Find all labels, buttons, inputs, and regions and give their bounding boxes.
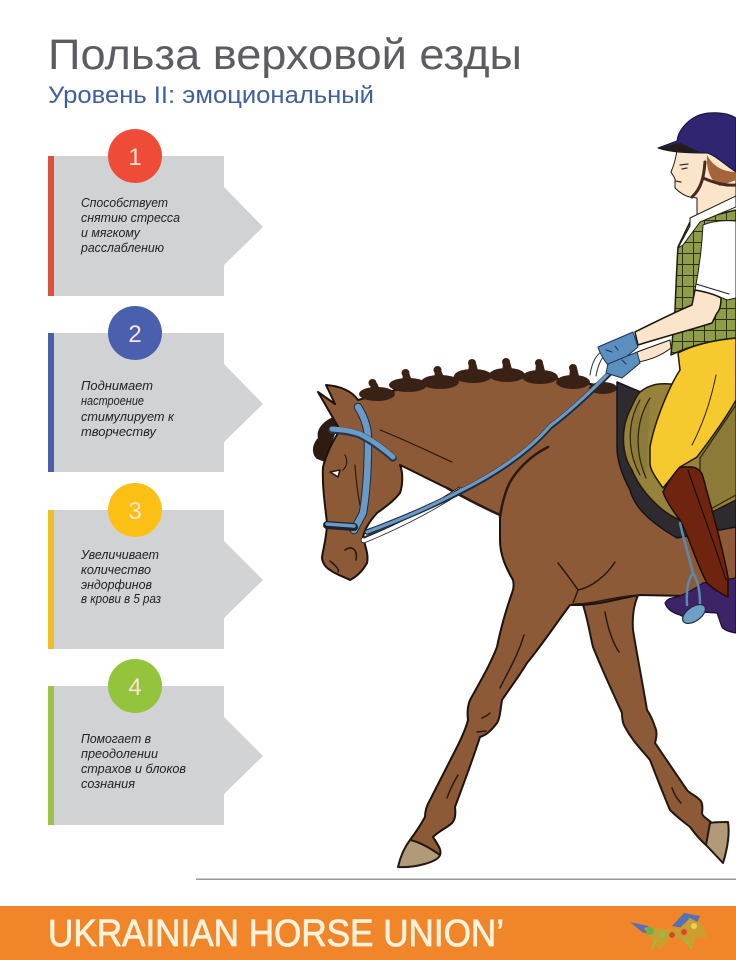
panel: benefit 3: в крови в 5 раз <box>81 592 161 606</box>
rider leg: breeches <box>650 338 736 488</box>
panel: benefit 4: преодолении <box>81 747 158 761</box>
horse body with near foreleg <box>318 374 736 867</box>
rider arm <box>635 290 721 345</box>
braided mane <box>359 358 617 401</box>
rider sleeve <box>695 221 736 300</box>
panel: benefit 3: Увеличивает <box>80 548 159 562</box>
rider neck and face <box>671 150 736 215</box>
panel: benefit 4: 4 <box>128 674 142 701</box>
panel: benefit 4: сознания <box>81 777 135 791</box>
title: Польза верховой езды <box>48 31 522 79</box>
forelock <box>313 417 340 462</box>
ground line <box>196 878 736 880</box>
panel: benefit 1 <box>48 129 263 296</box>
panel: benefit 1: и мягкому <box>81 226 141 240</box>
panel: benefit 3 <box>48 483 263 649</box>
panel: benefit 2: Поднимает <box>81 379 153 393</box>
logo: folk-art horse <box>630 913 707 950</box>
riding helmet <box>658 113 736 172</box>
horse anatomy lines <box>330 430 640 798</box>
riding gloves <box>598 332 640 378</box>
panel: benefit 2: 2 <box>128 321 142 348</box>
panel: benefit 3: количество <box>81 563 151 577</box>
footer band <box>0 906 736 960</box>
panel: benefit 1: расслаблению <box>80 241 165 255</box>
footer brand name: UKRAINIAN HORSE UNION’ <box>48 913 504 955</box>
reins <box>364 348 615 540</box>
helmet peak <box>658 143 700 152</box>
rider far arm <box>637 340 671 362</box>
bridle <box>327 407 393 530</box>
panel: benefit 2: творчеству <box>81 425 157 439</box>
panel: benefit 1: 1 <box>128 144 142 171</box>
saddle <box>623 384 736 520</box>
panel: benefit 1: Способствует <box>81 196 168 210</box>
panel: benefit 2 <box>48 306 263 472</box>
rider collar <box>678 196 736 248</box>
rider boot <box>663 467 728 597</box>
far foreleg <box>583 595 729 863</box>
panel: benefit 1: снятию стресса <box>81 211 180 225</box>
rider hair <box>692 155 736 197</box>
panel: benefit 3: 3 <box>128 498 142 525</box>
panel: benefit 4: Помогает в <box>81 732 151 746</box>
panel: benefit 4 <box>48 659 263 825</box>
subtitle: Уровень II: эмоциональный <box>48 82 374 109</box>
rider foot <box>665 578 736 633</box>
panel: benefit 4: страхов и блоков <box>81 762 186 776</box>
panel: benefit 2: стимулирует к <box>81 410 175 424</box>
stirrup <box>679 523 709 627</box>
rider vest <box>671 210 736 355</box>
panel: benefit 3: эндорфинов <box>81 578 152 592</box>
illustration: horse and rider <box>313 113 736 867</box>
panel: benefit 2: настроение <box>81 394 144 408</box>
saddle pad <box>617 382 736 538</box>
